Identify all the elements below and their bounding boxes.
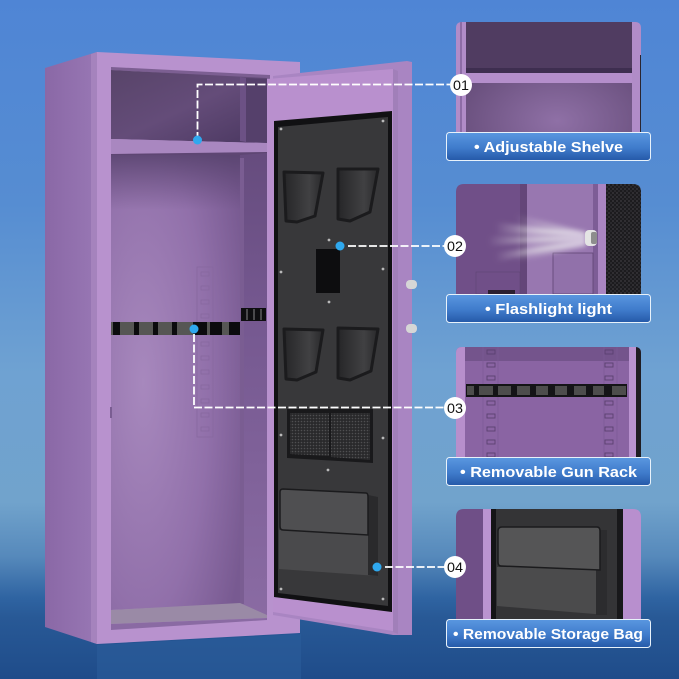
upper compartment back wall	[111, 70, 267, 143]
number badge 02	[444, 235, 466, 257]
locking bolt bottom	[406, 324, 417, 333]
safe carpet floor	[111, 603, 267, 624]
removable rack	[466, 384, 627, 397]
number badge 02: 02	[447, 238, 463, 254]
door inner frame	[267, 69, 393, 631]
callout line 01	[193, 84, 450, 144]
number badge 03	[444, 397, 466, 419]
cabinet side panel	[45, 52, 97, 644]
thumbnail: adjustable shelf	[456, 22, 642, 132]
bag body	[497, 567, 596, 614]
shelf	[111, 139, 267, 156]
number badge 04	[444, 556, 466, 578]
thumbnail: flashlight	[456, 184, 641, 294]
perforated strip	[197, 267, 213, 437]
safe cabinet	[45, 52, 301, 679]
black door panel	[274, 111, 392, 612]
thumbnail: storage bag	[456, 509, 641, 619]
label: removable storage bag: • Removable Storage Bag	[453, 626, 643, 643]
flashlight holder	[316, 249, 340, 293]
gun rack	[111, 308, 266, 335]
label: adjustable shelve	[446, 132, 650, 160]
label: removable gun rack: • Removable Gun Rack	[460, 464, 638, 481]
locking bolt top	[406, 280, 417, 289]
label: flashlight light: • Flashlight light	[485, 301, 612, 318]
lower right pocket	[338, 328, 378, 380]
open door	[267, 61, 417, 635]
door mesh strip	[606, 184, 641, 294]
callout line 03	[190, 324, 445, 408]
door outer flange	[273, 61, 412, 635]
top right pocket	[338, 169, 378, 221]
light beam	[492, 216, 588, 260]
label: flashlight light	[446, 294, 650, 322]
shelf strip	[465, 73, 632, 83]
flashlight bulb	[585, 230, 597, 246]
top left pocket	[284, 172, 323, 222]
lower compartment side wall	[240, 153, 267, 616]
grey door liner	[278, 117, 388, 606]
label: removable storage bag	[446, 620, 650, 648]
number badge 01	[450, 74, 472, 96]
hinge slot	[110, 407, 112, 418]
number badge 01: 01	[453, 77, 469, 93]
number badge 04: 04	[447, 559, 463, 575]
thumbnail: gun rack	[456, 347, 641, 457]
bag flap	[498, 527, 600, 570]
number badge 03: 03	[447, 400, 463, 416]
cabinet reflection	[97, 634, 301, 679]
mesh pocket	[287, 409, 373, 463]
label: removable gun rack	[446, 458, 650, 486]
rack slots	[483, 347, 617, 457]
door screws	[280, 120, 384, 600]
storage bag	[279, 489, 378, 576]
lower left pocket	[284, 329, 323, 380]
callout line 02	[336, 242, 445, 250]
cabinet top edge highlight	[111, 67, 270, 79]
callout line 04	[372, 562, 445, 572]
label: adjustable shelve: • Adjustable Shelve	[474, 139, 623, 156]
lower compartment back wall	[111, 155, 240, 610]
cabinet front frame	[97, 52, 300, 644]
